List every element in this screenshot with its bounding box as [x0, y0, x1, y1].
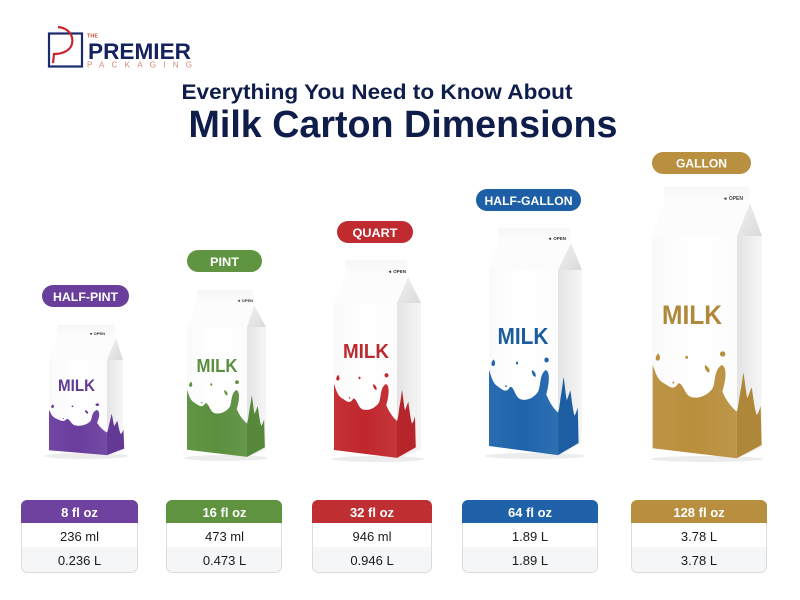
table: 8 fl oz: 0.236 L	[58, 553, 101, 568]
carton: pint	[184, 290, 268, 461]
carton: half-pint: MILK	[58, 376, 96, 395]
logo: The Premier Packaging: THE	[87, 34, 98, 40]
table: 8 fl oz: 8 fl oz	[61, 505, 98, 520]
table: 32 fl oz: 0.946 L	[350, 553, 394, 568]
table: 16 fl oz: 473 ml	[205, 529, 244, 544]
carton: pint: ◄ OPEN	[237, 298, 253, 303]
label pill: gallon	[652, 152, 751, 174]
title	[182, 80, 618, 146]
table: 64 fl oz: 1.89 L	[512, 529, 548, 544]
carton: half-pint: ◄ OPEN	[89, 331, 105, 336]
carton: gallon: MILK	[662, 300, 722, 330]
table: 128 fl oz: 128 fl oz	[673, 505, 725, 520]
logo: The Premier Packaging: PREMIER	[88, 39, 191, 64]
label pill: half-gallon	[476, 189, 581, 211]
table: 128 fl oz: 3.78 L	[681, 529, 717, 544]
table: 16 fl oz: 16 fl oz	[202, 505, 247, 520]
carton: half-gallon	[485, 228, 585, 459]
table: 32 fl oz	[312, 500, 432, 572]
table: 8 fl oz	[21, 500, 138, 572]
title: Milk Carton Dimensions	[188, 104, 618, 146]
label pill: half-gallon: HALF-GALLON	[484, 194, 572, 208]
table: 32 fl oz: 32 fl oz	[350, 505, 395, 520]
label pill: half-pint: HALF-PINT	[53, 290, 119, 304]
table: 16 fl oz: 0.473 L	[203, 553, 246, 568]
carton: gallon	[651, 187, 763, 462]
label pill: pint	[187, 250, 262, 272]
title: Everything You Need to Know About	[182, 80, 572, 104]
carton: gallon: ◄ OPEN	[722, 196, 743, 202]
table: 8 fl oz: 236 ml	[60, 529, 99, 544]
carton: quart: MILK	[343, 341, 390, 363]
logo: The Premier Packaging: PACKAGING	[87, 60, 192, 70]
table: 64 fl oz: 1.89 L	[512, 553, 548, 568]
label pill: gallon: GALLON	[676, 156, 727, 170]
carton: half-pint	[44, 325, 128, 459]
table: 16 fl oz	[166, 500, 282, 572]
label pill: quart	[337, 221, 413, 243]
table: 64 fl oz	[462, 500, 598, 572]
carton: quart	[332, 260, 424, 462]
table: 128 fl oz: 3.78 L	[681, 553, 717, 568]
label pill: quart: QUART	[352, 226, 398, 240]
label pill: pint: PINT	[210, 255, 240, 269]
table: 128 fl oz	[631, 500, 767, 572]
carton: half-gallon: ◄ OPEN	[548, 236, 566, 241]
carton: quart: ◄ OPEN	[388, 269, 406, 274]
table: 32 fl oz: 946 ml	[352, 529, 392, 544]
table: 64 fl oz: 64 fl oz	[508, 505, 553, 520]
carton: pint: MILK	[196, 356, 238, 376]
label pill: half-pint	[42, 285, 129, 307]
logo: The Premier Packaging	[49, 27, 192, 70]
carton: half-gallon: MILK	[498, 323, 549, 349]
